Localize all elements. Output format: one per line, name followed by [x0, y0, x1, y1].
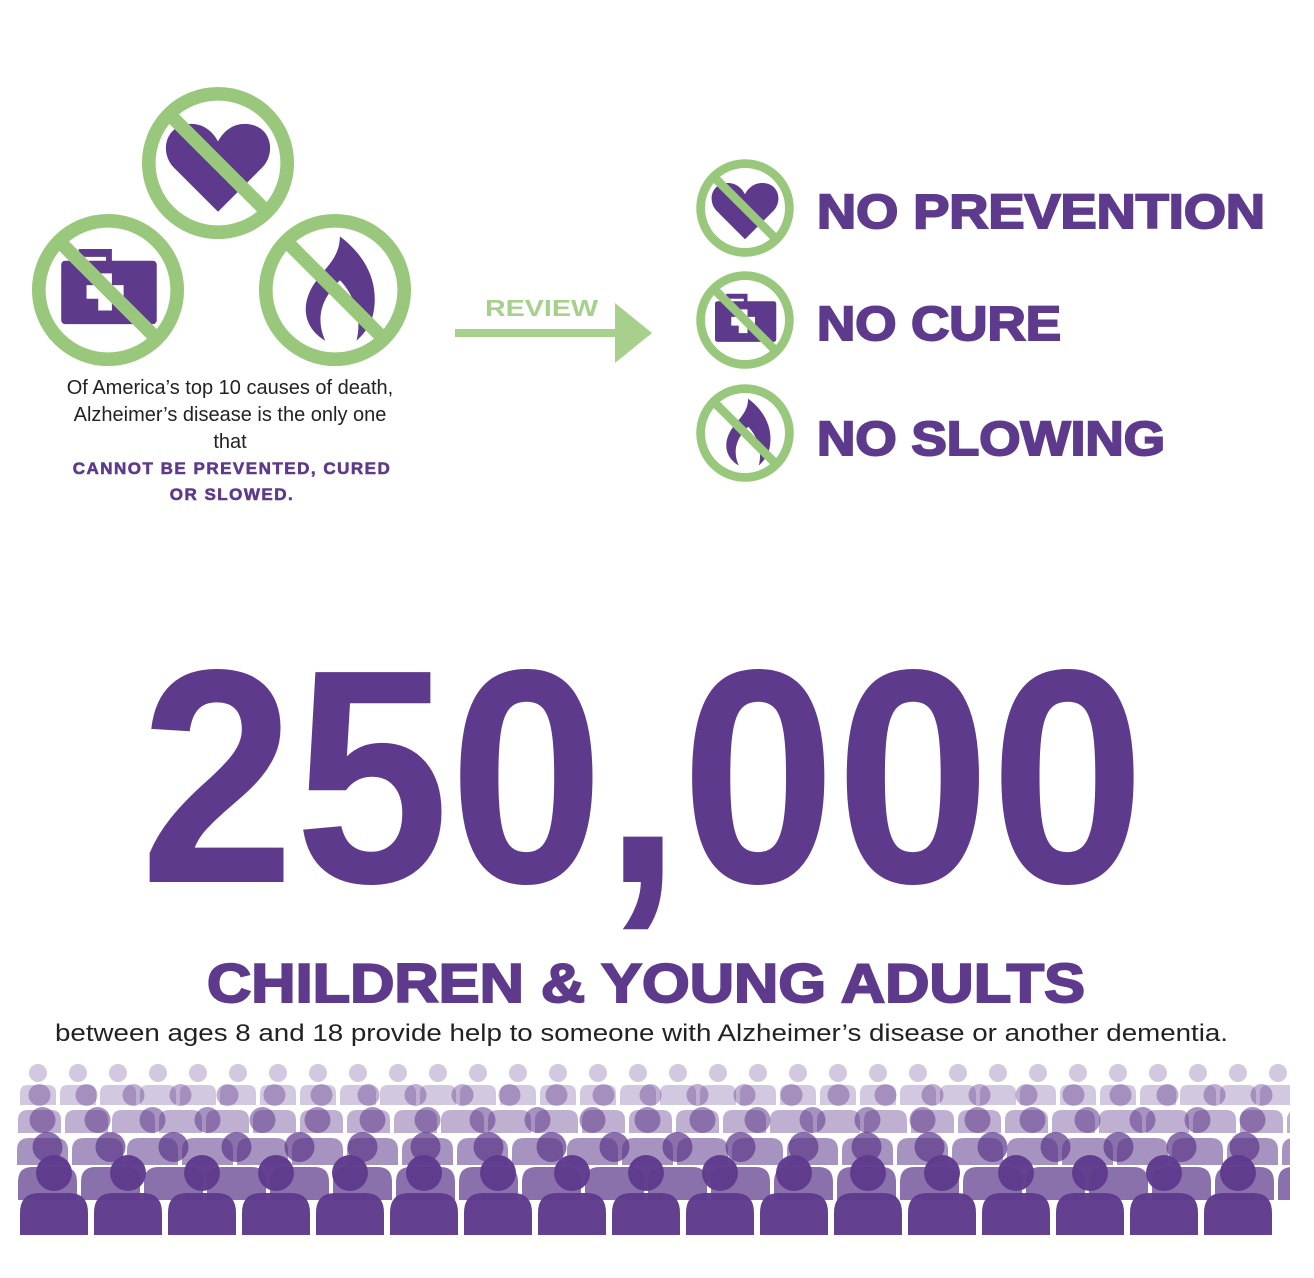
- item: no slowing: NO SLOWING: [817, 413, 1165, 466]
- big number: 250,000: [140, 606, 1145, 947]
- item: no slowing: [701, 389, 1165, 477]
- icon: banned flame: [266, 221, 404, 359]
- text block: causes of death: [67, 377, 393, 504]
- item: no cure: NO CURE: [817, 298, 1061, 351]
- text block: causes of death: Alzheimer’s disease is the only one: [74, 404, 386, 426]
- subtitle: between ages 8 and 18 provide help to someone with Alzheimer’s disease or another dementia.: [55, 1020, 1228, 1047]
- text block: causes of death: OR SLOWED.: [170, 485, 294, 504]
- icon group: three banned icons: [39, 94, 404, 359]
- text block: causes of death: that: [213, 431, 247, 453]
- arrow: review: REVIEW: [485, 295, 598, 321]
- item: no prevention: NO PREVENTION: [817, 186, 1265, 239]
- icon: banned heart: [149, 94, 287, 232]
- text block: causes of death: CANNOT BE PREVENTED, CURED: [73, 459, 391, 478]
- text block: causes of death: Of America’s top 10 causes of death,: [67, 377, 393, 399]
- crowd illustration: [15, 1062, 1290, 1236]
- arrow: review: [455, 295, 652, 363]
- item: no prevention: [701, 164, 1265, 252]
- heading: children & young adults: CHILDREN & YOUNG ADULTS: [207, 952, 1085, 1014]
- item: no cure: [701, 276, 1061, 364]
- icon: banned medical case: [39, 221, 177, 359]
- list: no prevention, cure, slowing: [701, 164, 1265, 477]
